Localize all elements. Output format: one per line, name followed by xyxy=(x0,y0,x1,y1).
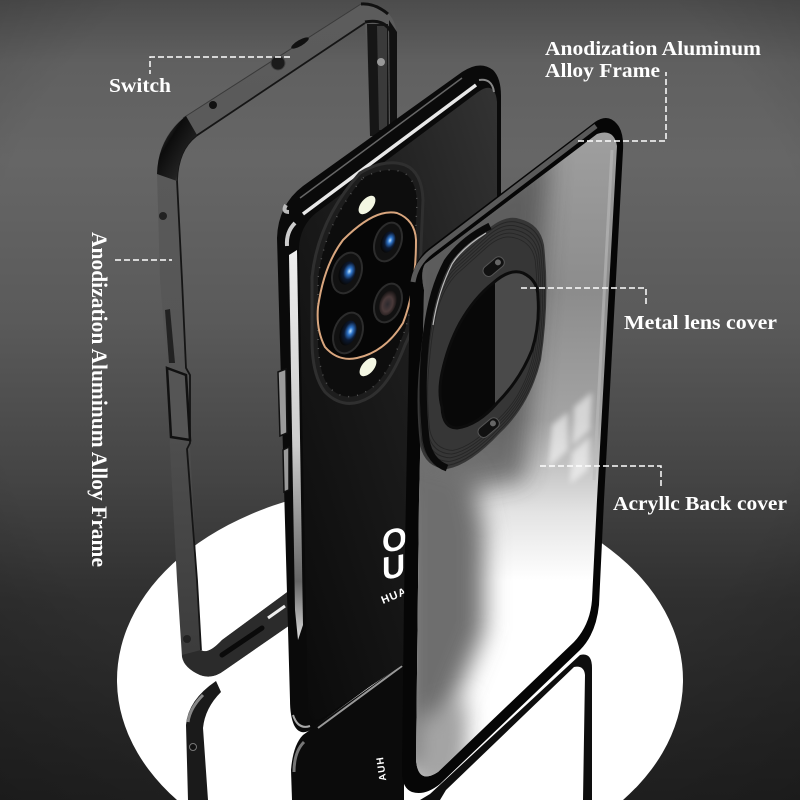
phone top highlights xyxy=(303,85,476,214)
phone side highlight xyxy=(289,250,303,640)
callout: acrylic back cover: Acryllc Back cover xyxy=(613,493,787,515)
flash bottom xyxy=(356,355,380,379)
reflected logo text: HUA xyxy=(375,757,389,783)
callout: metal lens cover xyxy=(521,288,777,334)
white circular platform xyxy=(117,485,683,800)
frame right post xyxy=(367,24,389,136)
camera island xyxy=(312,163,423,403)
reflection of phone xyxy=(291,663,404,800)
phone logo: U xyxy=(382,547,405,587)
callout: anodization aluminum alloy frame, top right xyxy=(545,38,761,141)
lens opening xyxy=(442,273,537,426)
switch button xyxy=(271,56,285,70)
lens middle left xyxy=(327,248,367,298)
frame bottom section xyxy=(182,590,290,677)
dial marks xyxy=(318,170,417,397)
machined ribs xyxy=(420,222,545,465)
reflection of frame xyxy=(186,681,221,800)
case translucent panel xyxy=(416,132,617,776)
phone logo: HUA xyxy=(380,586,409,607)
window reflection xyxy=(548,392,592,484)
callout: acrylic back cover xyxy=(540,466,787,515)
screw slot bottom xyxy=(476,416,501,440)
callout: metal lens cover: Metal lens cover xyxy=(624,312,777,334)
phone logo: O xyxy=(382,520,407,560)
lens top right xyxy=(369,219,407,265)
speaker slot xyxy=(290,35,310,51)
phone bottom highlight xyxy=(293,715,310,727)
callout: switch xyxy=(109,57,290,97)
phone body xyxy=(277,65,501,732)
callout: switch: Switch xyxy=(109,75,171,97)
frame glossy corner xyxy=(157,116,197,181)
glossy rim on left of cover xyxy=(423,226,490,468)
callout: anodization aluminum alloy frame, top right: Alloy Frame xyxy=(545,60,660,82)
frame side notch xyxy=(167,368,190,440)
phone volume buttons xyxy=(278,369,289,492)
frosted shadow blob xyxy=(400,450,484,770)
case rim grey bevel xyxy=(413,126,596,282)
screw slot top xyxy=(481,255,506,279)
phone matte back xyxy=(299,88,497,720)
phone logo xyxy=(380,528,406,604)
case outer rim xyxy=(402,118,623,793)
callout: anodization aluminum alloy frame, left: Anodization Aluminum Alloy Frame xyxy=(87,232,112,567)
frame screw holes xyxy=(209,101,217,109)
flash top xyxy=(355,193,379,217)
acrylic back case xyxy=(400,118,625,795)
dark tint near the left side xyxy=(405,150,550,500)
right edge shine xyxy=(594,150,612,480)
lens lower left xyxy=(328,308,368,358)
lens cover xyxy=(418,218,546,469)
frame side slot xyxy=(165,309,175,363)
lens right periscope xyxy=(369,280,407,326)
callout: anodization aluminum alloy frame, top right: Anodization Aluminum xyxy=(545,38,761,60)
gold camera ring xyxy=(318,212,416,359)
reflection of case xyxy=(420,655,592,800)
metal frame xyxy=(157,3,397,677)
